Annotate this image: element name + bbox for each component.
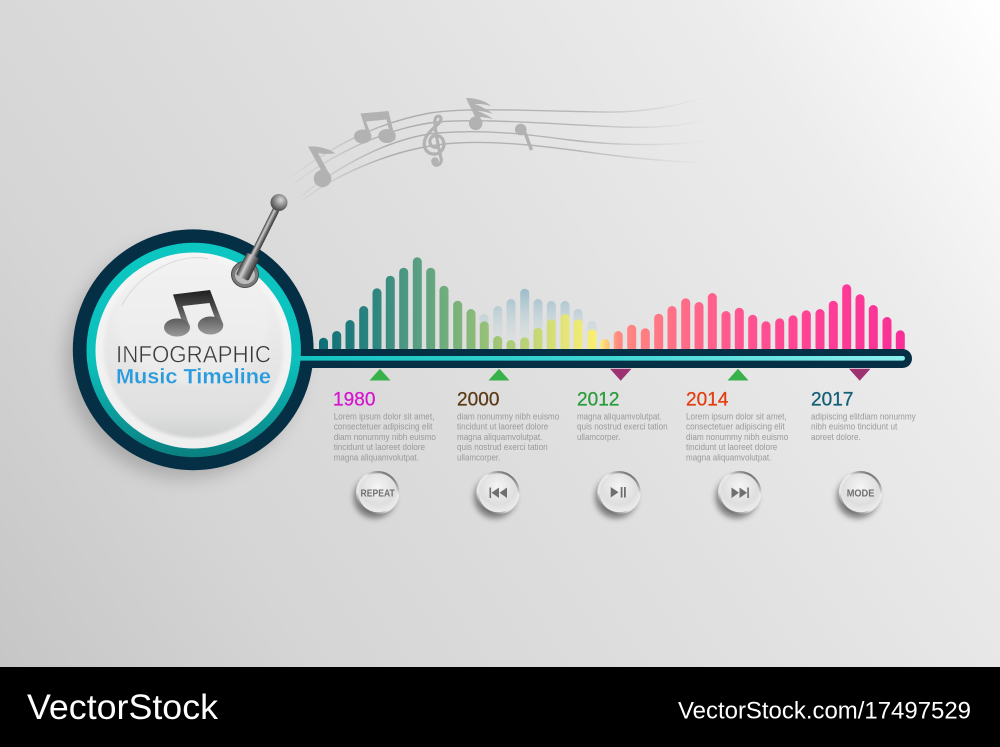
icon: eighth note (308, 146, 336, 187)
text block: 2014 (686, 390, 788, 462)
text block: 2017: aoreet dolore. (811, 432, 861, 442)
main dial (66, 194, 912, 478)
text block: 2017: 2017 (811, 390, 854, 410)
text block: 2014: magna aliquamvolutpat. (686, 452, 771, 462)
timeline inner line (296, 356, 905, 361)
marker 1980 (370, 369, 390, 380)
text block: 2012: quis nostrud exerci tation (577, 422, 668, 432)
button: next (716, 471, 761, 518)
back bars (480, 289, 596, 352)
title: INFOGRAPHIC (116, 341, 271, 368)
glass disk (96, 252, 292, 448)
text block: 2014: 2014 (686, 390, 729, 410)
marker 2000 (488, 369, 510, 380)
button: mode: MODE (847, 488, 874, 500)
footer logo text: VectorStock (27, 687, 218, 727)
text block: 2000: magna aliquamvolutpat. (457, 432, 542, 442)
text block: 2000 (457, 390, 559, 462)
text block: 1980: tincidunt ut laoreet dolore (334, 442, 425, 452)
text block: 2000: ullamcorper. (457, 452, 500, 462)
footer url text: VectorStock.com/17497529 (678, 697, 971, 724)
title: Music Timeline (116, 365, 271, 388)
timeline bar (290, 349, 912, 368)
dial outer ring (73, 229, 314, 470)
text block: 2000: diam nonummy nibh euismo (457, 411, 559, 421)
front bars (319, 257, 905, 353)
icon: rest note (515, 124, 532, 150)
text block: 2014: Lorem ipsum dolor sit amet, (686, 411, 787, 421)
text block: 2014: tincidunt ut laoreet dolore (686, 442, 777, 452)
timeline markers (370, 369, 870, 381)
music staff with notes (283, 97, 710, 200)
button: repeat (354, 471, 399, 518)
marker 2012 (610, 369, 632, 381)
footer bar (0, 667, 1000, 747)
text block: 1980: Lorem ipsum dolor sit amet, (334, 411, 434, 421)
text block: 2000: 2000 (457, 390, 500, 410)
text block: 1980 (333, 390, 436, 462)
title (116, 341, 271, 388)
equalizer chart (319, 257, 905, 353)
icon: beamed notes (354, 111, 396, 144)
text block: 2017: nibh euismo tincidunt ut (811, 422, 898, 432)
staff lines (283, 97, 710, 200)
icon: sixteenth note (466, 98, 493, 130)
text block: 1980: 1980 (333, 390, 376, 410)
button: repeat: REPEAT (360, 488, 395, 500)
text block: 1980: consectetuer adipiscing elit (334, 422, 433, 432)
marker 2014 (728, 369, 748, 380)
text block: 2017 (811, 390, 916, 442)
icon: treble clef (424, 116, 444, 165)
icon: metal lever (232, 194, 288, 288)
text block: 2012 (577, 390, 668, 442)
text block: 1980: magna aliquamvolutpat. (334, 452, 419, 462)
teal ring (86, 243, 301, 457)
text block: 2012: 2012 (577, 390, 620, 410)
text block: 2014: consectetuer adipiscing elit (686, 422, 785, 432)
text block: 2000: quis nostrud exerci tation (457, 442, 548, 452)
button: previous (474, 471, 520, 518)
dial shadow (66, 242, 302, 478)
icon: music note (164, 290, 224, 336)
text block: 1980: diam nonummy nibh euismo (334, 432, 436, 442)
text block: 2014: diam nonummy nibh euismo (686, 432, 788, 442)
marker 2017 (849, 369, 870, 381)
text block: 2012: ullamcorper. (577, 432, 620, 442)
button: mode (836, 471, 882, 518)
text block: 2012: magna aliquamvolutpat. (577, 411, 662, 421)
button: play pause (595, 471, 641, 518)
text block: 2000: tincidunt ut laoreet dolore (457, 422, 548, 432)
text block: 2017: adipiscing elitdiam nonummy (811, 411, 916, 421)
